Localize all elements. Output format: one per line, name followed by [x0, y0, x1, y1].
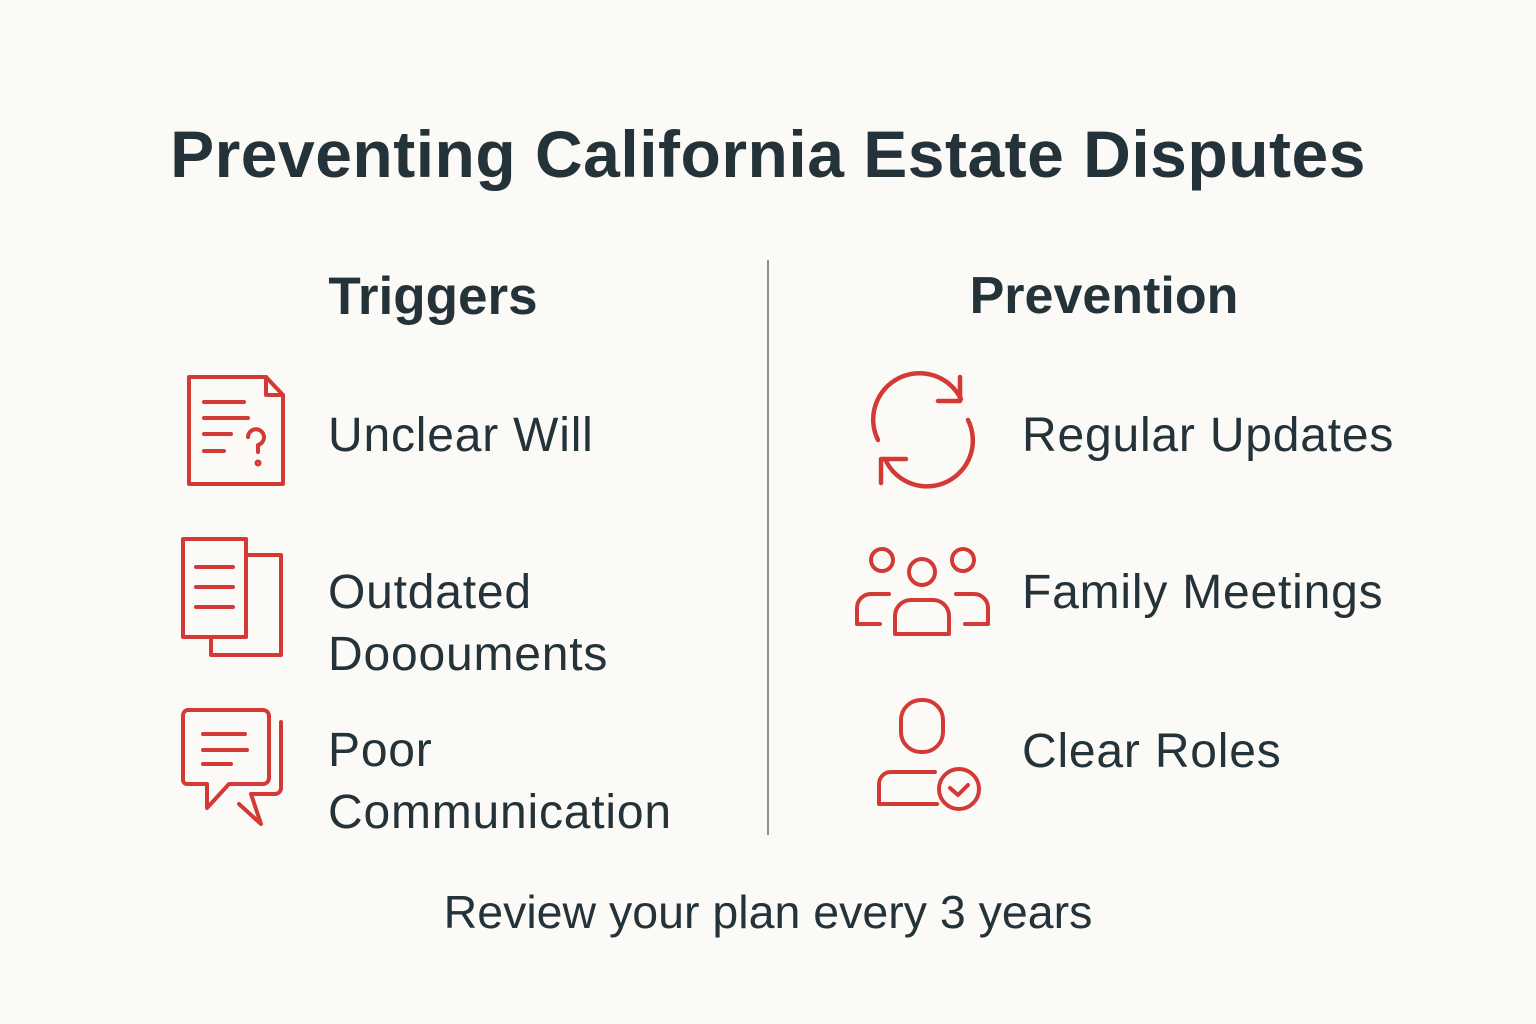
heading: Triggers: Triggers [328, 267, 538, 326]
divider [767, 260, 769, 835]
text: Poor Communication [328, 724, 672, 839]
title: Preventing California Estate Disputes [170, 117, 1366, 191]
text: Poor Communication: Poor [328, 724, 433, 777]
text: Poor Communication: Communication [328, 786, 672, 839]
icon: poor communication [181, 708, 283, 826]
icon: regular updates [870, 371, 976, 489]
text: Clear Roles: Clear Roles [1022, 725, 1282, 778]
icon: clear roles [877, 698, 981, 811]
text: Outdated Documents: Dooouments [328, 628, 608, 681]
icon: outdated documents [181, 537, 283, 657]
text: Outdated Documents [328, 566, 608, 681]
icon: unclear will document [187, 375, 285, 486]
text: Family Meetings: Family Meetings [1022, 566, 1383, 619]
footer note: Review your plan every 3 years [444, 886, 1092, 938]
text: Outdated Documents: Outdated [328, 566, 532, 619]
heading: Prevention: Prevention [970, 267, 1238, 325]
icon: family meetings [855, 547, 990, 636]
text: Unclear Will: Unclear Will [328, 409, 594, 462]
text: Regular Updates: Regular Updates [1022, 409, 1394, 462]
